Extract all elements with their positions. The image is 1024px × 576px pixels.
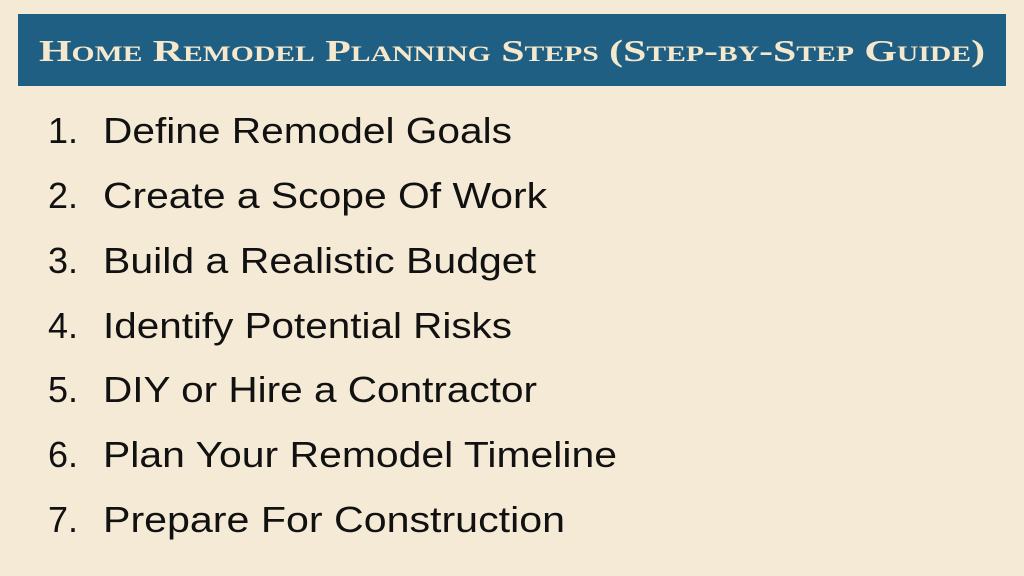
steps list <box>48 110 617 540</box>
step 5: DIY or Hire a Contractor <box>103 369 537 410</box>
title banner <box>18 14 1006 86</box>
step 3: Build a Realistic Budget <box>103 240 536 281</box>
title banner: Home Remodel Planning Steps (Step-by-Step Guide) <box>39 33 985 68</box>
step 4: Identify Potential Risks <box>103 305 512 346</box>
step 1: 1. <box>48 110 78 151</box>
step 7: Prepare For Construction <box>103 499 565 540</box>
step 5: 5. <box>48 369 78 410</box>
step 4: 4. <box>48 305 78 346</box>
step 1: Define Remodel Goals <box>103 110 512 151</box>
step 3: 3. <box>48 240 78 281</box>
step 6: 6. <box>48 434 78 475</box>
step 6: Plan Your Remodel Timeline <box>103 434 617 475</box>
step 2: 2. <box>48 175 78 216</box>
step 7: 7. <box>48 499 78 540</box>
step 2: Create a Scope Of Work <box>103 175 548 216</box>
